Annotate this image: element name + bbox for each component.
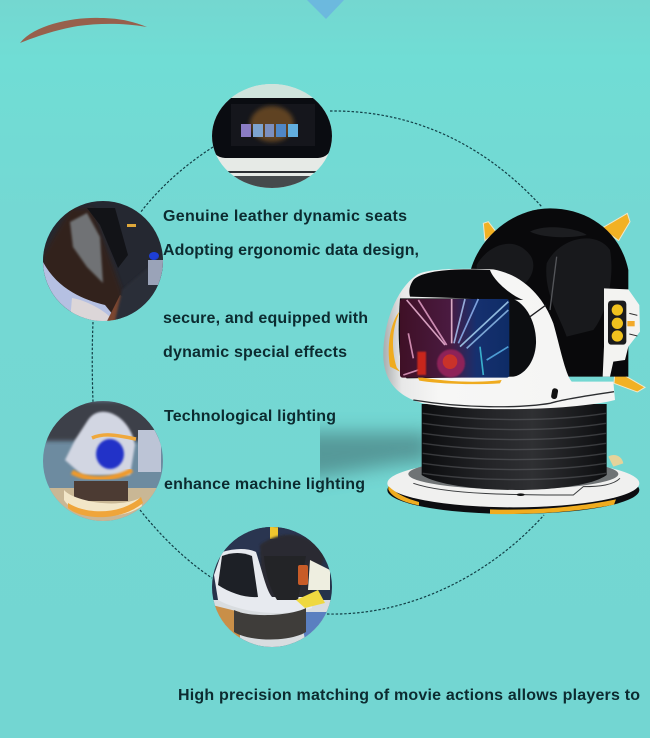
ribbed column (422, 404, 607, 490)
photo: full machine view (212, 527, 332, 647)
white shell (383, 269, 615, 409)
photo: technological lighting (43, 401, 163, 521)
top triangle marker (307, 0, 344, 19)
text: bottom statement: High precision matching of movie actions allows players to (178, 687, 640, 704)
text: leather seats heading: Genuine leather dynamic seats (163, 208, 407, 225)
machine shadow (300, 432, 430, 480)
base platform (387, 455, 639, 514)
text: lighting heading: Technological lighting (164, 408, 336, 425)
side control panel (603, 288, 640, 377)
VR screen image (400, 299, 509, 378)
photo: leather seats (43, 201, 163, 321)
fins (483, 213, 645, 392)
VR egg chair machine (383, 208, 645, 514)
text: special effects line: dynamic special effects (163, 344, 347, 361)
text: secure line: secure, and equipped with (163, 310, 368, 327)
pod back dome with seats (471, 208, 628, 377)
photo: touch screen console (211, 84, 332, 188)
text: ergonomic line: Adopting ergonomic data design, (163, 242, 419, 259)
brown swoosh (20, 18, 147, 43)
text: lighting description: enhance machine lighting (164, 476, 365, 493)
dashed connector ring (92, 111, 544, 614)
